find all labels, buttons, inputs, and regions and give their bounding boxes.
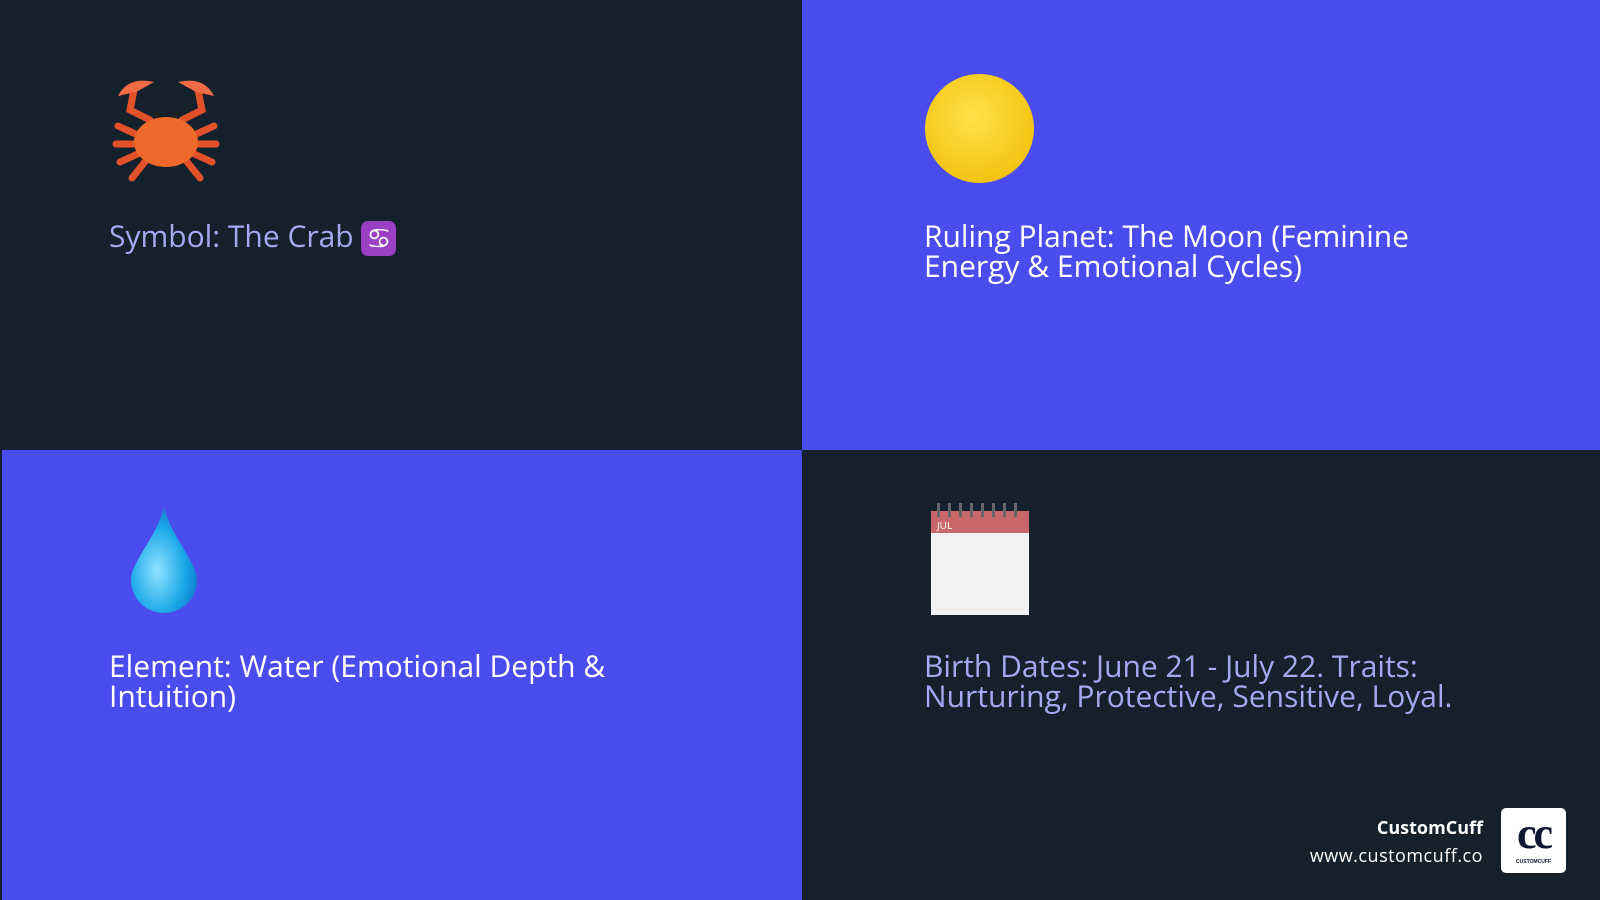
text: ruling planet: Ruling Planet: The Moon (Feminine Energy & Emotional Cycles) <box>924 215 1409 286</box>
text: symbol: Symbol: The Crab <box>109 215 354 256</box>
icon: crab <box>112 80 220 182</box>
logo <box>1501 808 1566 873</box>
panel: birth dates <box>802 450 1600 900</box>
panel: symbol <box>2 0 802 450</box>
panel: ruling planet <box>802 0 1600 450</box>
brand name: CustomCuff <box>1377 816 1483 840</box>
icon: calendar: JUL <box>937 518 952 532</box>
text: element: Element: Water (Emotional Depth & Intuition) <box>109 645 605 716</box>
brand block <box>1310 808 1566 873</box>
brand url: www.customcuff.co <box>1310 844 1483 868</box>
logo: cc <box>1517 809 1550 858</box>
text: symbol: ♋ <box>366 219 391 257</box>
panel: element <box>2 450 802 900</box>
icon: calendar <box>931 503 1029 615</box>
icon: moon <box>925 74 1034 183</box>
icon: water drop <box>131 508 197 613</box>
logo: CUSTOMCUFF <box>1516 859 1551 865</box>
text: birth dates: Birth Dates: June 21 - July 22. Traits: Nurturing, Protective, Sensitive, Loyal. <box>924 645 1452 716</box>
